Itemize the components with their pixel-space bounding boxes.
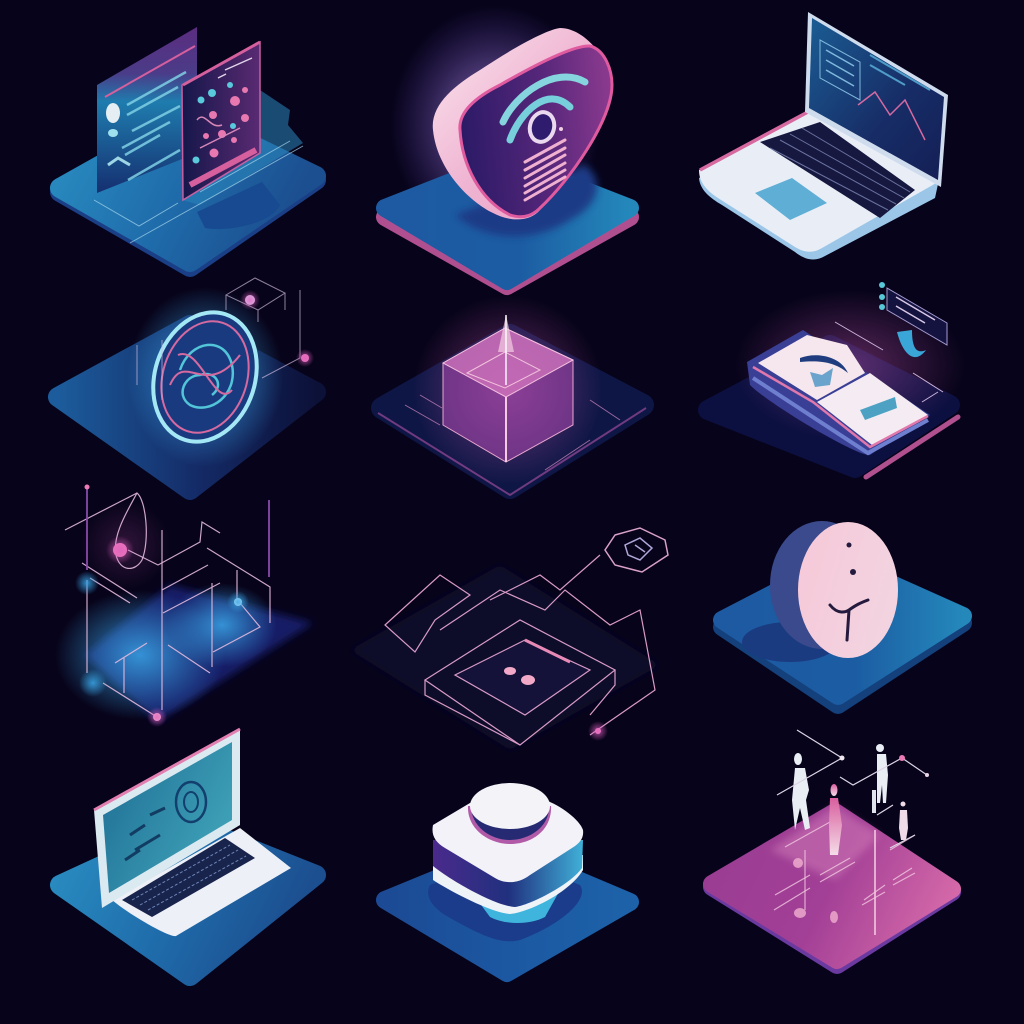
connection nodes bbox=[840, 755, 929, 777]
platform 8 bbox=[350, 565, 660, 750]
circuit traces bbox=[405, 395, 620, 470]
disc face bbox=[798, 522, 898, 658]
reflections bbox=[774, 822, 915, 935]
panel: open book bbox=[708, 282, 965, 477]
panel: glowing ring bbox=[58, 278, 316, 490]
laptop base bbox=[699, 96, 938, 252]
cyan foot bbox=[470, 890, 560, 923]
platform 7 bbox=[85, 585, 313, 722]
platform 9 bbox=[722, 560, 963, 705]
disc side bbox=[770, 521, 874, 649]
connection lines bbox=[777, 730, 927, 848]
figure right bbox=[876, 744, 888, 803]
panel: stacked device bbox=[385, 783, 630, 973]
wireframe box bbox=[94, 141, 303, 243]
panel: circuit diagram bbox=[350, 528, 668, 750]
panel: wifi shield on blue platform bbox=[385, 5, 630, 286]
white band bbox=[433, 855, 583, 914]
platform 12 bbox=[712, 812, 952, 965]
circuit dots bbox=[504, 667, 608, 741]
front document panel bbox=[182, 42, 260, 200]
wire frame bbox=[65, 487, 270, 717]
panel: wireframe room bbox=[55, 484, 313, 727]
translucent back box bbox=[182, 90, 303, 205]
book glow bbox=[735, 290, 965, 440]
symbol on disc bbox=[830, 542, 868, 640]
platform 10 bbox=[60, 825, 316, 976]
figure small bbox=[899, 802, 908, 840]
book pages bbox=[753, 335, 928, 447]
octagon node bbox=[605, 528, 668, 572]
platform top highlight bbox=[770, 806, 880, 880]
figure centre bbox=[829, 784, 842, 855]
laptop screen bbox=[805, 12, 948, 187]
device base bbox=[747, 330, 930, 455]
top slab bbox=[432, 800, 583, 882]
shield glow bbox=[390, 5, 600, 245]
text lines on shield bbox=[525, 140, 565, 200]
ring glow bbox=[127, 287, 283, 467]
shield face bbox=[460, 46, 612, 217]
wire lines and cube bbox=[137, 278, 300, 400]
keyboard bbox=[760, 122, 915, 218]
platform 1 bbox=[60, 115, 316, 267]
figure left bbox=[792, 753, 810, 830]
panel: people on pink platform bbox=[712, 730, 952, 965]
platform 11 bbox=[385, 850, 630, 973]
glow nodes bbox=[240, 290, 314, 367]
platform 6 bbox=[708, 345, 950, 468]
platform shadow bbox=[428, 855, 582, 941]
ring bbox=[137, 299, 273, 455]
room blue glow bbox=[55, 590, 225, 720]
circuit lines bbox=[385, 555, 655, 745]
back document panel bbox=[97, 27, 197, 193]
platform 5 bbox=[382, 335, 643, 488]
top button bbox=[468, 783, 551, 844]
laptop screen bbox=[94, 729, 240, 908]
laptop base bbox=[112, 828, 291, 936]
laptop base edge bbox=[699, 105, 938, 259]
panel: pink disc bbox=[722, 521, 963, 705]
panel: laptop with glass screen bbox=[60, 729, 316, 976]
reflected blobs bbox=[793, 858, 838, 923]
dark band bbox=[433, 840, 583, 907]
panel: glowing cube bbox=[378, 295, 646, 495]
shield body bbox=[433, 28, 612, 219]
glow points bbox=[75, 484, 249, 727]
trackpad bbox=[755, 178, 827, 220]
wifi symbol bbox=[503, 77, 585, 145]
glass cube bbox=[443, 315, 573, 462]
platform 4 bbox=[58, 325, 316, 490]
panel: document screens on blue platform bbox=[60, 27, 316, 267]
keyboard bbox=[122, 838, 255, 917]
floating UI bbox=[835, 282, 947, 402]
platform 2 bbox=[385, 160, 630, 286]
figure small back bbox=[872, 790, 876, 813]
panel: laptop with chart bbox=[699, 12, 948, 259]
cube glow bbox=[413, 295, 603, 485]
